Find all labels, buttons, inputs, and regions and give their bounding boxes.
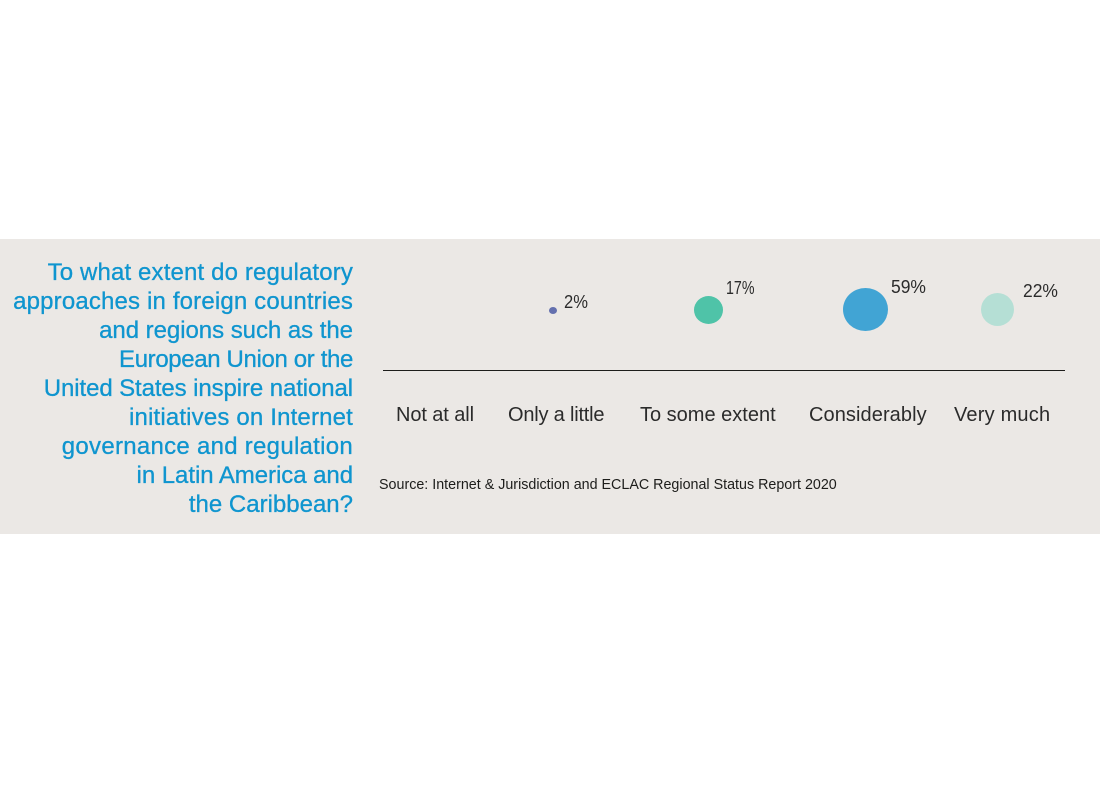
axis label: Considerably: Considerably <box>809 404 927 426</box>
heading: survey question: approaches in foreign countries <box>13 288 353 315</box>
heading: survey question: governance and regulation <box>62 433 353 460</box>
bubble: Very much <box>981 293 1014 326</box>
axis label: Not at all: Not at all <box>396 404 474 426</box>
value: 22%: 22% <box>1023 281 1058 301</box>
heading: survey question: initiatives on Internet <box>129 404 353 431</box>
value: 17%: 17% <box>726 278 754 298</box>
value: 2%: 2% <box>564 292 588 312</box>
panel: survey band <box>0 239 1100 534</box>
heading: survey question: To what extent do regulatory <box>48 259 353 286</box>
source note: Source: Internet & Jurisdiction and ECLAC Regional Status Report 2020 <box>379 477 837 493</box>
bubble: Considerably <box>843 288 888 331</box>
heading: survey question: the Caribbean? <box>189 491 353 518</box>
axis label: Very much: Very much <box>954 404 1050 426</box>
heading: survey question: in Latin America and <box>137 462 353 489</box>
heading: survey question: and regions such as the <box>99 317 353 344</box>
axis line <box>383 370 1065 371</box>
value: 59%: 59% <box>891 277 926 297</box>
bubble: To some extent <box>694 296 723 324</box>
heading: survey question: European Union or the <box>119 346 353 373</box>
heading: survey question: United States inspire national <box>44 375 353 402</box>
bubble: Only a little <box>549 306 557 314</box>
axis label: Only a little: Only a little <box>508 404 604 426</box>
axis label: To some extent: To some extent <box>640 404 776 426</box>
heading: survey question <box>13 259 353 518</box>
